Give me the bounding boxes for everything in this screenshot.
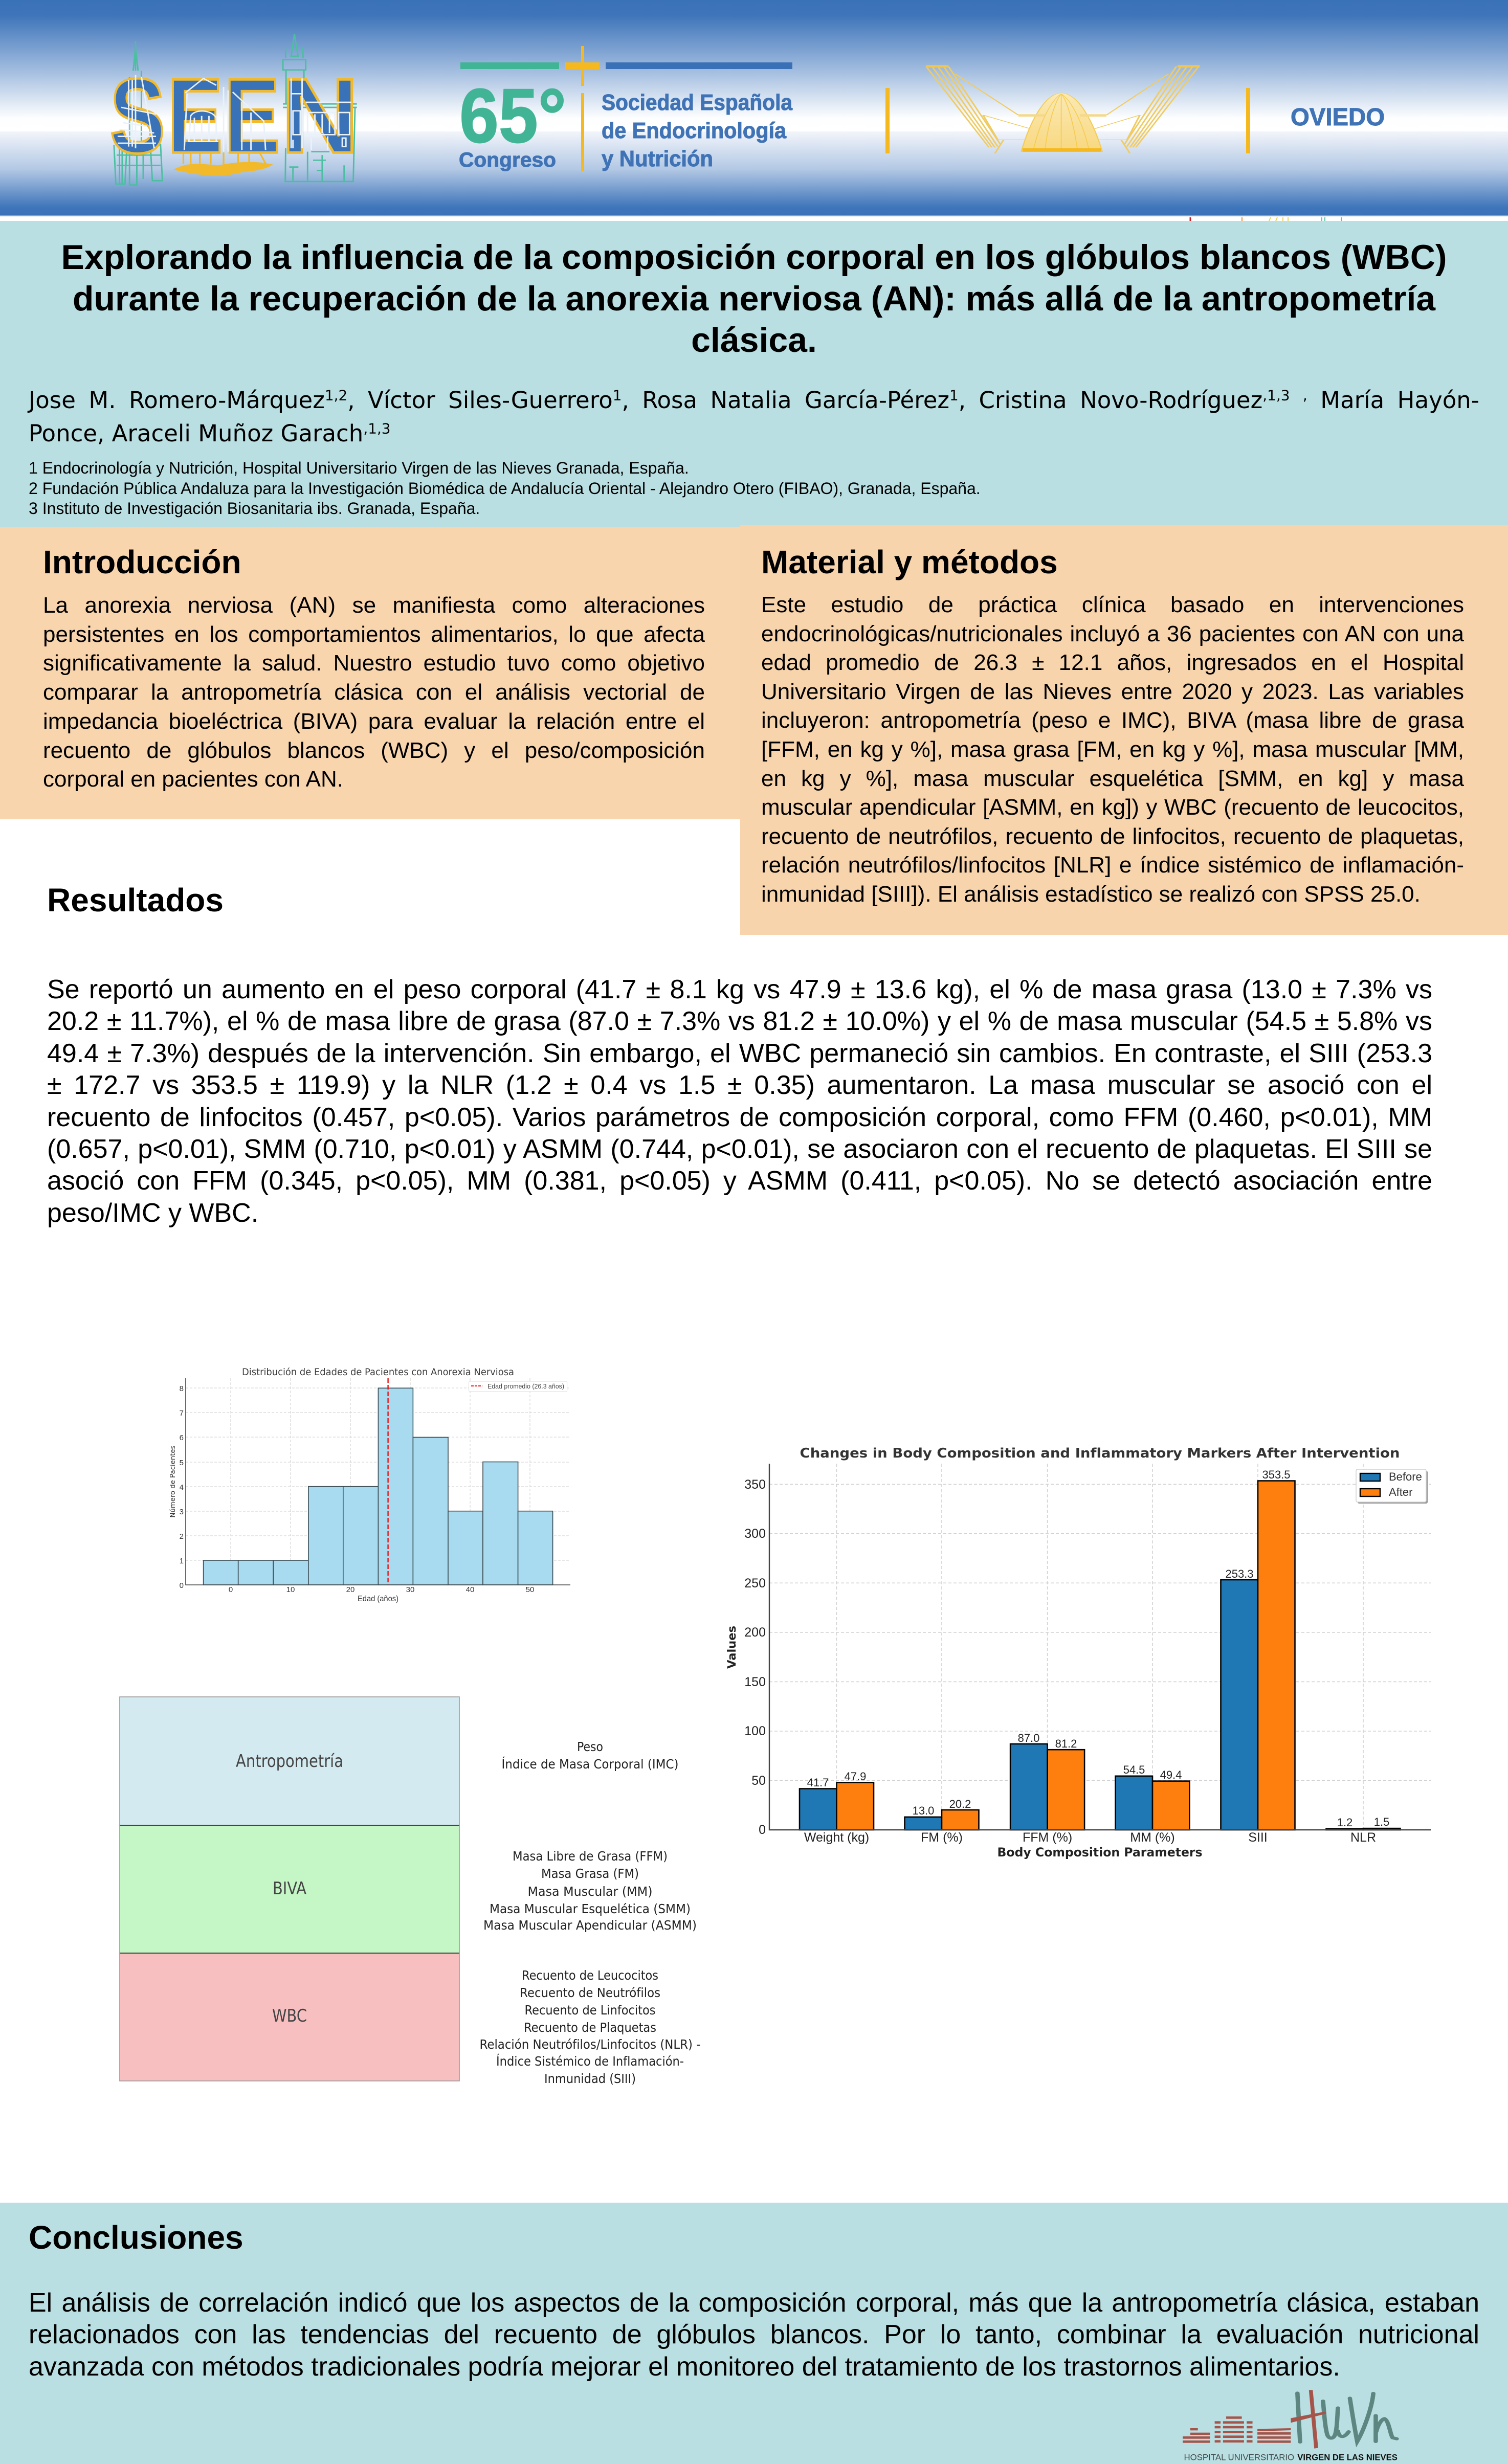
chart: before and after bars: Body Composition Parameters [997, 1845, 1202, 1860]
text: introducción: significativamente la salud. Nuestro estudio tuvo como objetivo [43, 651, 705, 676]
diagram: variable groups: Índice de Masa Corporal (IMC) [501, 1757, 678, 1772]
chart: age histogram: 10 [286, 1585, 295, 1594]
chart: age histogram: 8 [180, 1384, 184, 1393]
authors [28, 387, 1479, 447]
diagram: variable groups: Recuento de Linfocitos [525, 2003, 656, 2018]
diagram: variable groups: Masa Muscular (MM) [528, 1884, 653, 1899]
text: resultados: 20.2 ± 11.7%), el % de masa libre de grasa (87.0 ± 7.3% vs 81.2 ± 10.0%) y el % de masa muscular (54.5 ± 5.8% vs [47, 1006, 1432, 1036]
text: material y métodos: Este estudio de práctica clínica basado en intervenciones [761, 592, 1464, 617]
chart: age histogram: 6 [180, 1433, 184, 1442]
icon: Oviedo arch [926, 65, 1200, 153]
text: conclusiones: relacionados con las tendencias del recuento de glóbulos blancos. Por lo tanto, combinar la evaluación nutricional [29, 2320, 1479, 2349]
text: introducción: La anorexia nerviosa (AN) se manifiesta como alteraciones [43, 593, 705, 618]
text: material y métodos: en kg y %], masa muscular esquelética [SMM, en kg] y masa [761, 766, 1464, 791]
divider: gold right [1246, 88, 1250, 153]
diagram: variable groups: Inmunidad (SIII) [544, 2071, 636, 2086]
chart: before and after bars: 200 [744, 1625, 766, 1640]
diagram: variable groups: Índice Sistémico de Inflamación- [496, 2054, 684, 2069]
chart: before and after bars: 250 [744, 1576, 766, 1591]
chart: age histogram: 50 [526, 1585, 534, 1594]
text: introducción: corporal en pacientes con AN. [43, 767, 343, 792]
divider: gold left [885, 88, 890, 153]
text: material y métodos: inmunidad [SIII]). El análisis estadístico se realizó con SPSS 25.0. [761, 882, 1421, 907]
chart: age histogram: 7 [180, 1409, 184, 1418]
diagram: variable groups: Recuento de Leucocitos [522, 1968, 658, 1983]
text: conclusiones [29, 2288, 1479, 2382]
diagram: variable groups: WBC [272, 2006, 307, 2026]
text: material y métodos: endocrinológicas/nutricionales incluyó a 36 pacientes con AN con una [761, 621, 1464, 646]
chart: age histogram: 2 [180, 1532, 184, 1541]
text: resultados: 49.4 ± 7.3%) después de la intervención. Sin embargo, el WBC permaneció sin cambios. En contraste, el SIII (253.3 [47, 1039, 1432, 1068]
text: material y métodos: incluyeron: antropometría (peso e IMC), BIVA (masa libre de grasa [761, 708, 1464, 733]
text: material y métodos: muscular apendicular [ASMM, en kg]) y WBC (recuento de leucocitos, [761, 795, 1464, 820]
diagram: variable groups: Recuento de Plaquetas [524, 2020, 656, 2035]
chart: age histogram: 4 [180, 1483, 184, 1492]
chart: age histogram: 20 [346, 1585, 354, 1594]
text: resultados: Se reportó un aumento en el peso corporal (41.7 ± 8.1 kg vs 47.9 ± 13.6 kg), el % de masa grasa (13.0 ± 7.3% vs [47, 975, 1432, 1004]
heading: material y métodos: Material y métodos [761, 544, 1058, 580]
chart: before and after bars: Values [726, 1626, 739, 1669]
text: resultados: ± 172.7 vs 353.5 ± 119.9) y la NLR (1.2 ± 0.4 vs 1.5 ± 0.35) aumentaron. La masa muscular se asoció con el [47, 1070, 1432, 1100]
panel: introducción [0, 527, 740, 819]
chart: before and after bars: 350 [744, 1477, 766, 1492]
affiliations: 2 Fundación Pública Andaluza para la Investigación Biomédica de Andalucía Oriental - Alejandro Otero (FIBAO), Granada, España. [29, 479, 981, 497]
text: resultados: peso/IMC y WBC. [47, 1198, 258, 1228]
logo: SEEN [110, 34, 359, 185]
chart: before and after bars: 87.0 [1018, 1732, 1039, 1744]
chart: before and after bars: MM (%) [1130, 1830, 1175, 1845]
logo: SEEN: S [110, 56, 165, 175]
logo: Hospital Universitario Virgen de las Nieves: HOSPITAL UNIVERSITARIO [1184, 2453, 1294, 2462]
diagram: variable groups: Masa Grasa (FM) [541, 1866, 639, 1881]
text: resultados [47, 975, 1432, 1228]
header banner [0, 0, 1508, 221]
text: conclusiones: avanzada con métodos tradicionales podría mejorar el monitoreo del tratamiento de los trastornos alimentarios. [29, 2352, 1340, 2382]
text: material y métodos: Universitario Virgen de las Nieves entre 2020 y 2023. Las variables [761, 679, 1464, 704]
chart: before and after bars: NLR [1350, 1830, 1376, 1845]
text: resultados: (0.657, p<0.01), SMM (0.710, p<0.01) y ASMM (0.744, p<0.01), se asociaron con el recuento de plaquetas. El SIII se [47, 1134, 1432, 1164]
chart: age histogram: 40 [466, 1585, 474, 1594]
chart: before and after bars: 13.0 [913, 1804, 934, 1817]
text: introducción: persistentes en los comportamientos alimentarios, lo que afecta [43, 622, 705, 647]
text: material y métodos [761, 592, 1464, 907]
heading: conclusiones: Conclusiones [29, 2219, 243, 2256]
chart: before and after bars: 49.4 [1160, 1768, 1182, 1781]
chart: before and after bars: 100 [744, 1724, 766, 1738]
text: introducción [43, 593, 705, 792]
chart: before and after bars: 0 [759, 1823, 766, 1837]
diagram: variable groups: Masa Muscular Esquelética (SMM) [490, 1901, 691, 1916]
heading: resultados: Resultados [47, 882, 224, 919]
chart: age histogram: Edad promedio (26.3 años) [487, 1382, 564, 1390]
logo: 65 Congreso: 65° [459, 73, 566, 159]
authors: Ponce, Araceli Muñoz Garach,1,3 [29, 420, 391, 447]
affiliations [29, 459, 981, 518]
title: Explorando la influencia de la composición corporal en los glóbulos blancos (WBC) [61, 238, 1447, 277]
text: resultados: asoció con FFM (0.345, p<0.05), MM (0.381, p<0.05) y ASMM (0.411, p<0.05). No se detectó asociación entre [47, 1166, 1432, 1196]
logo: 65 Congreso [459, 46, 792, 171]
panel: title block [0, 221, 1508, 527]
chart: before and after bars: Before [1389, 1470, 1422, 1483]
logo: 65 Congreso: de Endocrinología [602, 118, 786, 143]
logo: Hospital Universitario Virgen de las Nieves [1183, 2390, 1399, 2462]
chart: age histogram: Número de Pacientes [169, 1445, 177, 1518]
chart: before and after bars: 150 [744, 1675, 766, 1689]
logo: 65 Congreso: y Nutrición [602, 146, 713, 171]
diagram: variable groups: Recuento de Neutrófilos [520, 1985, 660, 2000]
heading: introducción: Introducción [43, 544, 241, 580]
chart: before and after bars: Changes in Body Composition and Inflammatory Markers After Intervention [800, 1446, 1400, 1461]
chart: age histogram: 5 [180, 1459, 184, 1467]
title: clásica. [691, 321, 817, 360]
authors: Jose M. Romero-Márquez1,2, Víctor Siles-Guerrero1, Rosa Natalia García-Pérez1, Cristina Novo-Rodríguez,1,3 , María Hayón- [29, 387, 1479, 414]
text: introducción: comparar la antropometría clásica con el análisis vectorial de [43, 680, 705, 705]
text: resultados: recuento de linfocitos (0.457, p<0.05). Varios parámetros de composición corporal, como FFM (0.460, p<0.01), MM [47, 1103, 1432, 1132]
text: material y métodos: [FFM, en kg y %], masa grasa [FM, en kg y %], masa muscular [MM, [761, 737, 1464, 762]
chart: before and after bars: 81.2 [1055, 1737, 1077, 1750]
chart: before and after bars: 1.5 [1374, 1816, 1389, 1828]
logo: SEEN: N [281, 57, 359, 175]
chart: before and after bars: SIII [1248, 1830, 1268, 1845]
panel: material y métodos [740, 525, 1508, 935]
chart: age histogram: 30 [406, 1585, 414, 1594]
chart: before and after bars: 50 [751, 1774, 766, 1788]
logo: 65 Congreso: Congreso [459, 149, 556, 171]
chart: before and after bars: Weight (kg) [804, 1830, 869, 1845]
diagram: variable groups: Masa Libre de Grasa (FFM) [513, 1849, 668, 1864]
chart: before and after bars: FM (%) [921, 1830, 963, 1845]
chart: age histogram: 3 [180, 1508, 184, 1516]
chart: age histogram: 1 [180, 1557, 184, 1565]
chart: before and after bars: 253.3 [1225, 1567, 1254, 1580]
text: introducción: recuento de glóbulos blancos (WBC) y el peso/composición [43, 738, 705, 763]
diagram: variable groups: Antropometría [236, 1751, 343, 1772]
diagram: variable groups: Peso [577, 1739, 603, 1754]
panel: conclusiones [0, 2203, 1508, 2464]
chart: before and after bars: 41.7 [807, 1776, 829, 1789]
diagram: variable groups: Masa Muscular Apendicular (ASMM) [483, 1918, 697, 1933]
affiliations: 1 Endocrinología y Nutrición, Hospital Universitario Virgen de las Nieves Granada, España. [29, 459, 689, 477]
diagram: variable groups: Relación Neutrófilos/Linfocitos (NLR) - [480, 2037, 701, 2052]
text: material y métodos: recuento de neutrófilos, recuento de linfocitos, recuento de plaquetas, [761, 824, 1464, 849]
logo: SEEN: E [167, 56, 223, 175]
chart: age histogram: Distribución de Edades de Pacientes con Anorexia Nerviosa [242, 1367, 514, 1378]
title: durante la recuperación de la anorexia nerviosa (AN): más allá de la antropometría [73, 279, 1435, 318]
chart: before and after bars: 47.9 [845, 1770, 866, 1783]
chart: before and after bars: After [1389, 1486, 1412, 1498]
chart: before and after bars: 353.5 [1262, 1468, 1291, 1481]
logo: 65 Congreso: Sociedad Española [602, 90, 792, 115]
logo: SEEN: E [224, 56, 280, 175]
logo: Hospital Universitario Virgen de las Nieves: VIRGEN DE LAS NIEVES [1297, 2453, 1398, 2462]
text: introducción: impedancia bioeléctrica (BIVA) para evaluar la relación entre el [43, 709, 705, 734]
text: material y métodos: relación neutrófilos/linfocitos [NLR] e índice sistémico de inflamación- [761, 853, 1464, 878]
chart: before and after bars: FFM (%) [1023, 1830, 1072, 1845]
chart: age histogram: Edad (años) [358, 1595, 398, 1603]
text: conclusiones: El análisis de correlación indicó que los aspectos de la composición corporal, más que la antropometría clásica, estaban [29, 2288, 1479, 2318]
diagram: variable groups: BIVA [273, 1878, 306, 1899]
text: material y métodos: edad promedio de 26.3 ± 12.1 años, ingresados en el Hospital [761, 650, 1464, 675]
chart: before and after bars: 300 [744, 1527, 766, 1541]
chart: before and after bars: 20.2 [949, 1798, 971, 1810]
chart: before and after bars: 54.5 [1123, 1763, 1145, 1776]
city label: OVIEDO: OVIEDO [1291, 104, 1385, 131]
chart: age histogram: 0 [229, 1585, 233, 1594]
affiliations: 3 Instituto de Investigación Biosanitaria ibs. Granada, España. [29, 499, 480, 518]
chart: before and after bars: 1.2 [1337, 1816, 1352, 1829]
title [61, 238, 1447, 360]
chart: age histogram: 0 [180, 1581, 184, 1590]
